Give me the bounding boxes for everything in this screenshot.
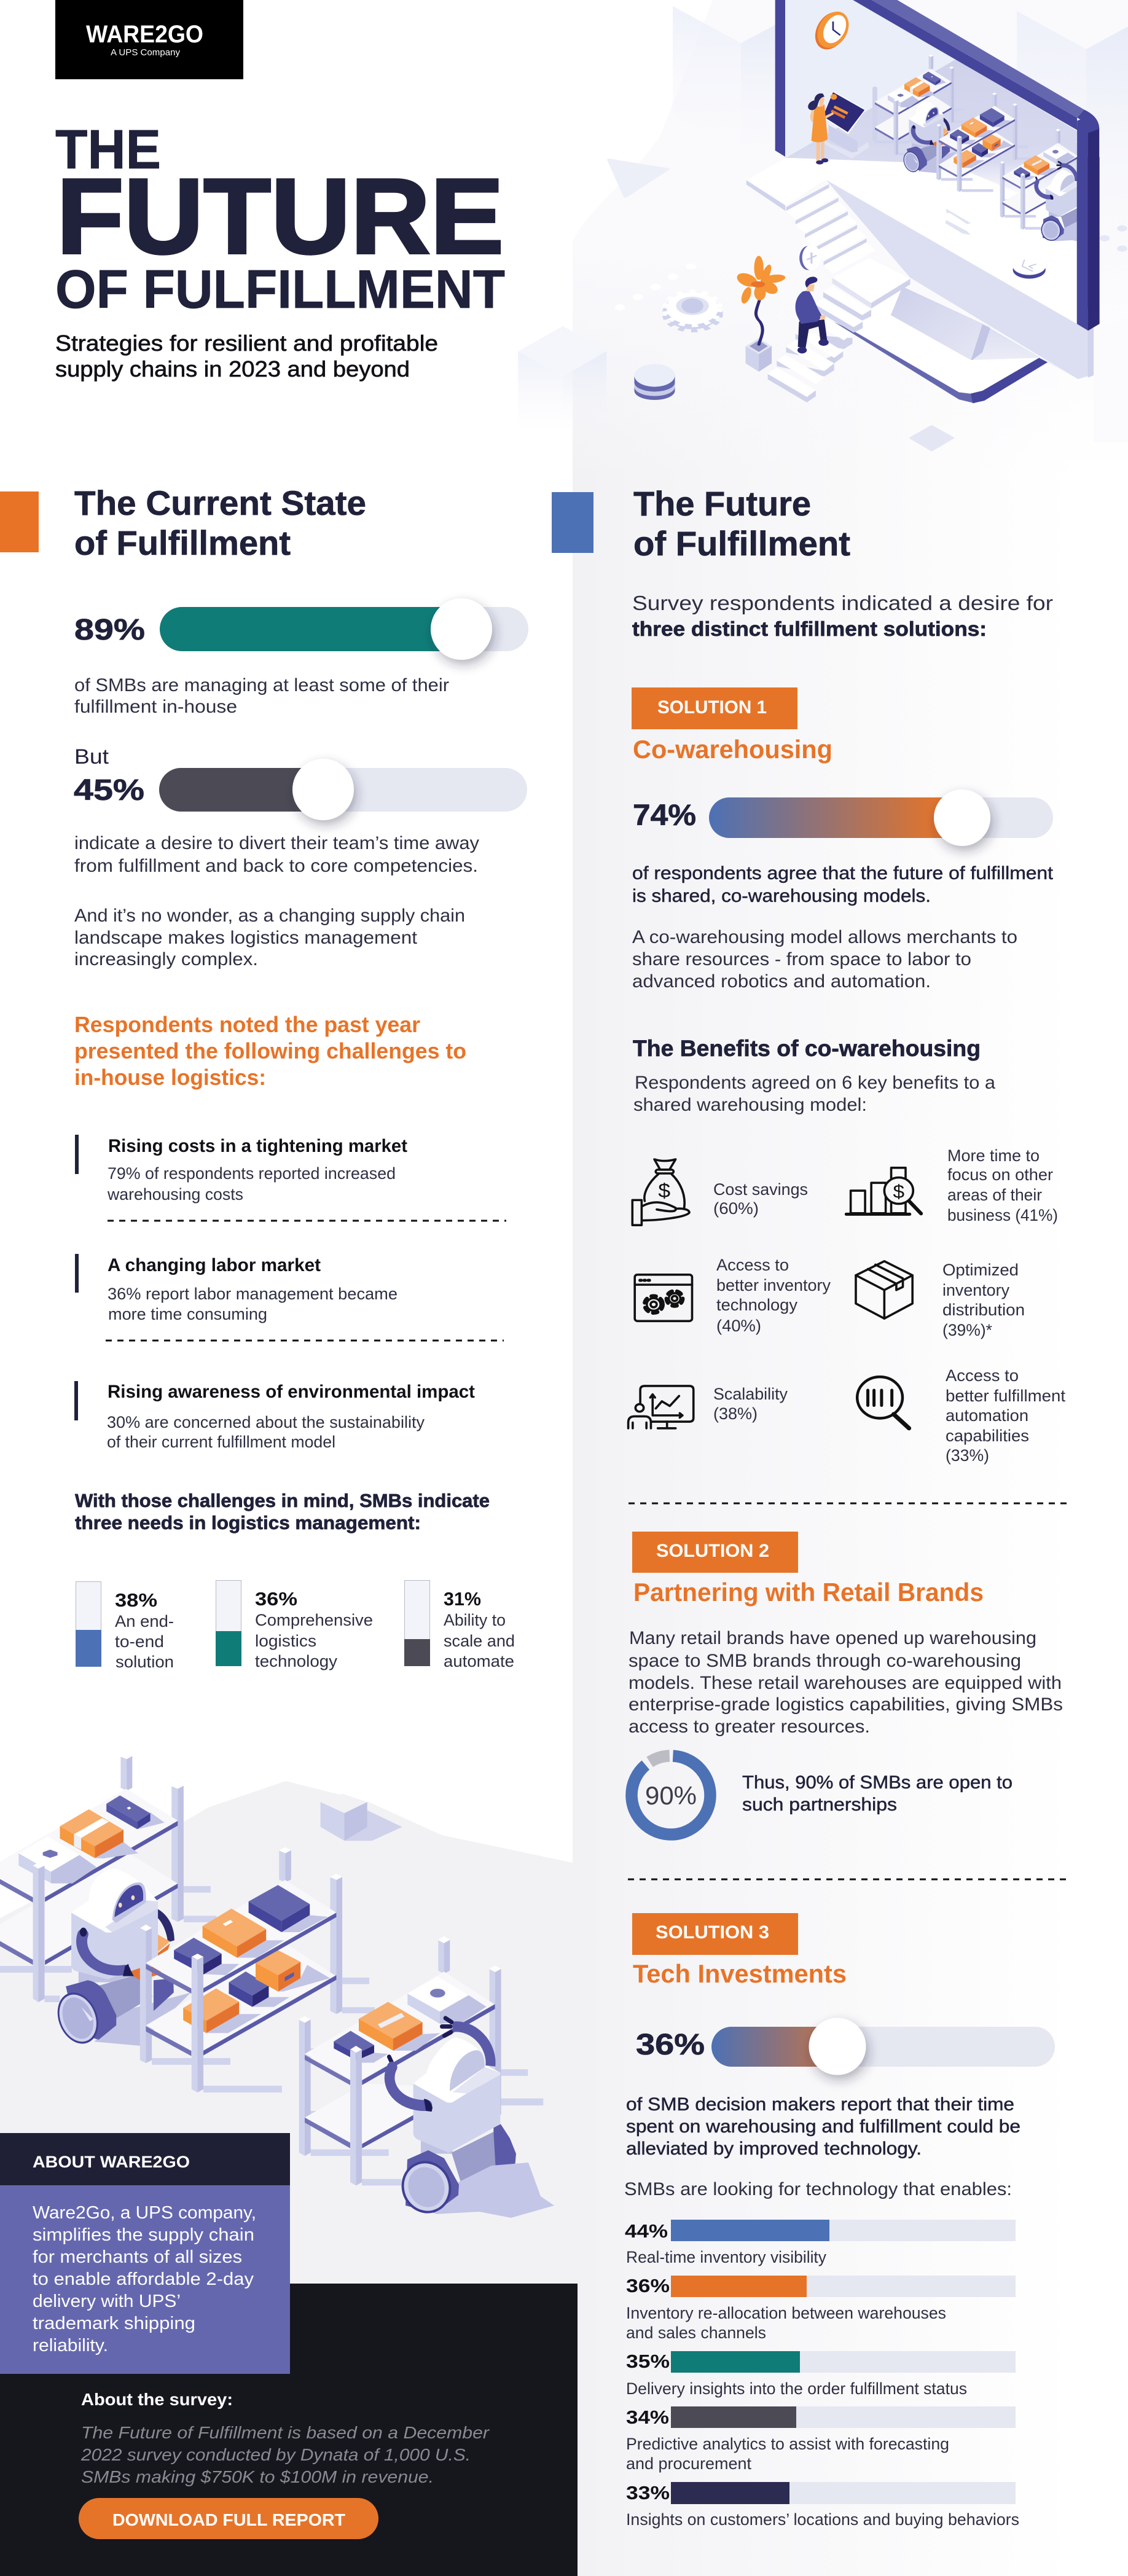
text supply chain bbox=[74, 906, 465, 969]
orange challenges heading bbox=[74, 1012, 466, 1090]
hero illustration bbox=[518, 0, 1128, 451]
icon: box bbox=[856, 1261, 912, 1318]
challenge environmental impact: of their current fulfillment model bbox=[107, 1433, 335, 1451]
icon: money bag: $ bbox=[658, 1180, 670, 1202]
text supply chain: increasingly complex. bbox=[74, 949, 258, 969]
bar 35 percent: Delivery insights into the order fulfillment status bbox=[626, 2379, 967, 2398]
slider 36 percent: 36% bbox=[636, 2029, 705, 2061]
benefit automation bbox=[946, 1366, 1065, 1465]
need 31 percent: scale and bbox=[444, 1632, 515, 1650]
need 38 percent: 38% bbox=[115, 1589, 157, 1611]
section marker blue bbox=[552, 492, 593, 553]
orange challenges heading: in-house logistics: bbox=[74, 1065, 266, 1090]
slider 45 percent bbox=[74, 745, 527, 820]
benefit inventory technology: (40%) bbox=[716, 1317, 761, 1335]
footer dark background bbox=[0, 2284, 578, 2576]
subtitle bbox=[55, 331, 438, 382]
needs heading bbox=[75, 1490, 490, 1533]
bar 33 percent: 33% bbox=[626, 2482, 670, 2504]
text supply chain: landscape makes logistics management bbox=[74, 928, 418, 948]
solution 2 text: Many retail brands have opened up warehousing bbox=[629, 1628, 1036, 1648]
icon: chart magnifier: $ bbox=[893, 1181, 904, 1202]
donut caption bbox=[742, 1772, 1012, 1815]
benefit automation: (33%) bbox=[946, 1446, 989, 1465]
heading future bbox=[633, 484, 850, 563]
need 36 percent: technology bbox=[255, 1652, 337, 1670]
need 38 percent: An end- bbox=[115, 1612, 174, 1631]
benefit automation: automation bbox=[946, 1406, 1028, 1425]
bar 34 percent bbox=[626, 2406, 1016, 2473]
heading current state: of Fulfillment bbox=[74, 523, 291, 562]
donut caption: Thus, 90% of SMBs are open to bbox=[742, 1772, 1012, 1793]
need 31 percent bbox=[404, 1580, 515, 1670]
needs heading: three needs in logistics management: bbox=[75, 1512, 421, 1533]
bar 35 percent bbox=[626, 2351, 1016, 2398]
lower plate bbox=[832, 258, 1078, 403]
donut caption: such partnerships bbox=[742, 1795, 897, 1815]
benefit inventory technology: technology bbox=[716, 1296, 797, 1314]
window frame bbox=[775, 0, 1099, 308]
solution 2 text bbox=[629, 1628, 1063, 1737]
slider 89 percent bbox=[74, 598, 528, 660]
need 31 percent: Ability to bbox=[444, 1611, 506, 1629]
warehouse shelves and robots bbox=[872, 55, 1102, 244]
text 74 percent: is shared, co-warehousing models. bbox=[632, 886, 931, 906]
challenge labor market: A changing labor market bbox=[108, 1255, 321, 1275]
about the survey: SMBs making $750K to $100M in revenue. bbox=[81, 2467, 434, 2486]
benefit inventory technology: Access to bbox=[716, 1256, 789, 1274]
benefit inventory distribution: inventory bbox=[942, 1281, 1009, 1299]
technology intro: SMBs are looking for technology that enables: bbox=[624, 2179, 1012, 2199]
about the survey: The Future of Fulfillment is based on a December bbox=[81, 2423, 490, 2442]
solution 2 text: space to SMB brands through co-warehousing bbox=[629, 1651, 1021, 1671]
text 45 percent bbox=[74, 833, 479, 876]
slider 89 percent: 89% bbox=[74, 614, 145, 646]
co-warehousing description: advanced robotics and automation. bbox=[632, 971, 931, 992]
bar 34 percent: Predictive analytics to assist with forecasting bbox=[626, 2435, 949, 2453]
benefit more time: areas of their bbox=[947, 1186, 1042, 1204]
challenge labor market: more time consuming bbox=[108, 1305, 267, 1323]
icon: window gears bbox=[635, 1275, 692, 1321]
solution 2 badge: SOLUTION 2 bbox=[656, 1541, 769, 1561]
co-warehousing description: share resources - from space to labor to bbox=[632, 949, 971, 969]
bar 34 percent: and procurement bbox=[626, 2454, 751, 2473]
need 36 percent: logistics bbox=[255, 1632, 316, 1650]
about text: reliability. bbox=[33, 2336, 108, 2355]
benefit cost savings: Cost savings bbox=[713, 1180, 808, 1199]
text 45 percent: from fulfillment and back to core competencies. bbox=[74, 856, 478, 876]
about text bbox=[33, 2203, 256, 2355]
benefit automation: capabilities bbox=[946, 1427, 1029, 1445]
right panel background bbox=[573, 240, 1128, 2576]
solution 2 badge bbox=[632, 1532, 798, 1573]
heading current state bbox=[74, 483, 366, 562]
download button bbox=[79, 2498, 378, 2539]
man on stairs bbox=[796, 276, 829, 353]
text 36 percent: spent on warehousing and fulfillment could be bbox=[626, 2116, 1020, 2137]
floating dots bbox=[615, 264, 696, 310]
coin stack bbox=[634, 364, 675, 400]
benefit automation: better fulfillment bbox=[946, 1387, 1065, 1405]
about text: simplifies the supply chain bbox=[33, 2225, 254, 2245]
challenge rising costs: 79% of respondents reported increased bbox=[108, 1164, 396, 1183]
need 38 percent: solution bbox=[116, 1653, 174, 1671]
text supply chain: And it’s no wonder, as a changing supply chain bbox=[74, 906, 465, 926]
benefit inventory distribution: Optimized bbox=[942, 1261, 1019, 1279]
subtitle: supply chains in 2023 and beyond bbox=[55, 356, 410, 382]
benefit scalability: (38%) bbox=[713, 1404, 758, 1423]
bar 36 percent: and sales channels bbox=[626, 2323, 766, 2342]
benefit inventory distribution: distribution bbox=[942, 1301, 1025, 1319]
text 89 percent: fulfillment in-house bbox=[74, 697, 237, 717]
need 31 percent: automate bbox=[444, 1652, 514, 1670]
donut 90 percent: 90% bbox=[645, 1781, 697, 1810]
benefit scalability: Scalability bbox=[713, 1385, 788, 1403]
subtitle: Strategies for resilient and profitable bbox=[55, 331, 438, 356]
orange challenges heading: Respondents noted the past year bbox=[74, 1012, 420, 1037]
bar 33 percent bbox=[626, 2482, 1019, 2529]
co-warehousing description: A co-warehousing model allows merchants to bbox=[632, 927, 1017, 947]
icon: scalability presenter bbox=[629, 1386, 694, 1428]
benefit inventory distribution: (39%)* bbox=[942, 1321, 992, 1339]
upper stairs bbox=[786, 184, 875, 274]
need 38 percent: to-end bbox=[115, 1632, 164, 1651]
bar 36 percent bbox=[626, 2275, 1016, 2342]
bar 44 percent: Real-time inventory visibility bbox=[626, 2248, 826, 2266]
about text: for merchants of all sizes bbox=[33, 2247, 242, 2267]
flower pot bbox=[733, 256, 787, 372]
bar 36 percent: 36% bbox=[626, 2275, 670, 2296]
woman bbox=[808, 93, 834, 165]
solution 1 badge bbox=[632, 687, 797, 729]
logo: WARE2GO bbox=[86, 21, 203, 48]
needs heading: With those challenges in mind, SMBs indicate bbox=[75, 1490, 490, 1511]
benefits intro: shared warehousing model: bbox=[633, 1095, 867, 1115]
challenge environmental impact: 30% are concerned about the sustainability bbox=[107, 1413, 425, 1431]
challenge rising costs: warehousing costs bbox=[107, 1185, 243, 1204]
download button: DOWNLOAD FULL REPORT bbox=[112, 2510, 345, 2529]
slider 36 percent bbox=[636, 2018, 1055, 2075]
need 36 percent: Comprehensive bbox=[255, 1611, 373, 1629]
bar 35 percent: 35% bbox=[626, 2351, 670, 2372]
benefit more time: business (41%) bbox=[947, 1206, 1058, 1224]
solution 3 badge: SOLUTION 3 bbox=[656, 1922, 769, 1943]
heading future: of Fulfillment bbox=[633, 524, 850, 563]
solution 2 text: access to greater resources. bbox=[629, 1717, 870, 1737]
back wall and floor bbox=[785, 0, 1077, 235]
need 31 percent: 31% bbox=[444, 1588, 481, 1610]
solution 1 badge: SOLUTION 1 bbox=[657, 697, 767, 718]
slider 74 percent bbox=[633, 789, 1053, 846]
solution 2 text: models. These retail warehouses are equipped with bbox=[629, 1673, 1062, 1693]
bar 44 percent: 44% bbox=[625, 2220, 668, 2242]
main title bbox=[55, 119, 505, 319]
solution 3 title: Tech Investments bbox=[633, 1959, 847, 1988]
icon: money bag bbox=[632, 1159, 689, 1225]
bar chart: technology needs bbox=[625, 2220, 1019, 2529]
text 36 percent: alleviated by improved technology. bbox=[626, 2139, 922, 2159]
challenge labor market: 36% report labor management became bbox=[108, 1285, 398, 1303]
about the survey: About the survey: bbox=[81, 2390, 233, 2409]
benefit more time: More time to bbox=[947, 1146, 1040, 1165]
bar 34 percent: 34% bbox=[626, 2406, 669, 2428]
text 45 percent: indicate a desire to divert their team’s time away bbox=[74, 833, 479, 853]
text 36 percent bbox=[626, 2094, 1020, 2159]
need 38 percent bbox=[76, 1581, 174, 1671]
slider 45 percent: But bbox=[74, 745, 109, 769]
panel: current state bbox=[0, 483, 528, 1671]
benefit more time: focus on other bbox=[947, 1165, 1053, 1184]
orange challenges heading: presented the following challenges to bbox=[74, 1038, 466, 1063]
survey intro bbox=[632, 592, 1053, 640]
text 89 percent bbox=[74, 675, 449, 717]
solution 1 title: Co-warehousing bbox=[633, 735, 832, 764]
benefit automation: Access to bbox=[946, 1366, 1019, 1385]
benefits intro bbox=[633, 1073, 995, 1115]
text 89 percent: of SMBs are managing at least some of their bbox=[74, 675, 449, 695]
gear bbox=[665, 291, 720, 331]
heading current state: The Current State bbox=[74, 483, 366, 522]
challenge labor market bbox=[75, 1254, 398, 1323]
text 74 percent: of respondents agree that the future of fulfillment bbox=[632, 863, 1054, 883]
heading future: The Future bbox=[633, 484, 811, 523]
solution 2 text: enterprise-grade logistics capabilities, giving SMBs bbox=[629, 1694, 1063, 1715]
donut 90 percent bbox=[632, 1756, 710, 1834]
kiosk bbox=[822, 91, 869, 159]
about text: Ware2Go, a UPS company, bbox=[33, 2203, 256, 2223]
plus coin bbox=[799, 245, 821, 270]
co-warehousing description bbox=[632, 927, 1017, 992]
logo: A UPS Company bbox=[111, 47, 180, 58]
bar 33 percent: Insights on customers’ locations and buying behaviors bbox=[626, 2510, 1019, 2529]
panel: about ware2go bbox=[0, 2133, 290, 2374]
about text: trademark shipping bbox=[33, 2314, 195, 2333]
need 36 percent: 36% bbox=[255, 1588, 297, 1610]
bar 44 percent bbox=[625, 2220, 1016, 2266]
benefit inventory technology bbox=[716, 1256, 831, 1335]
about the survey: 2022 survey conducted by Dynata of 1,000 U.S. bbox=[80, 2445, 471, 2464]
cart coin bbox=[1013, 257, 1046, 279]
about text: delivery with UPS’ bbox=[33, 2292, 181, 2311]
challenge rising costs bbox=[75, 1135, 407, 1204]
need 36 percent bbox=[216, 1580, 373, 1670]
benefit cost savings bbox=[713, 1180, 808, 1218]
clock bbox=[809, 7, 855, 53]
benefit more time bbox=[947, 1146, 1058, 1224]
slider 74 percent: 74% bbox=[633, 799, 696, 832]
challenge environmental impact bbox=[74, 1381, 475, 1451]
benefit inventory technology: better inventory bbox=[716, 1276, 831, 1294]
panel: about ware2go: ABOUT WARE2GO bbox=[33, 2153, 190, 2171]
warehouse illustration bbox=[0, 1753, 573, 2284]
main title: THE bbox=[55, 119, 161, 181]
panel: future of fulfillment bbox=[552, 484, 1071, 2529]
text 36 percent: of SMB decision makers report that their time bbox=[626, 2094, 1014, 2115]
about text: to enable affordable 2-day bbox=[33, 2269, 254, 2289]
section marker orange bbox=[0, 491, 39, 552]
slider 45 percent: 45% bbox=[74, 774, 144, 807]
solution 2 title: Partnering with Retail Brands bbox=[633, 1578, 984, 1607]
survey intro: three distinct fulfillment solutions: bbox=[632, 617, 987, 640]
benefits intro: Respondents agreed on 6 key benefits to a bbox=[635, 1073, 995, 1093]
about the survey bbox=[80, 2390, 490, 2486]
benefit inventory distribution bbox=[942, 1261, 1025, 1339]
benefits heading: The Benefits of co-warehousing bbox=[633, 1036, 981, 1061]
solution 3 badge bbox=[632, 1913, 798, 1955]
bar 36 percent: Inventory re-allocation between warehouses bbox=[626, 2304, 946, 2322]
main title: FUTURE bbox=[57, 156, 504, 276]
survey intro: Survey respondents indicated a desire for bbox=[632, 592, 1053, 614]
challenge rising costs: Rising costs in a tightening market bbox=[108, 1136, 407, 1156]
icon: chart magnifier bbox=[846, 1168, 921, 1214]
benefit scalability bbox=[713, 1385, 788, 1423]
icon: barcode search bbox=[857, 1377, 909, 1428]
benefit cost savings: (60%) bbox=[713, 1199, 759, 1218]
lower stairs bbox=[768, 286, 871, 402]
logo bbox=[55, 0, 243, 79]
challenge environmental impact: Rising awareness of environmental impact bbox=[108, 1382, 475, 1402]
main title: OF FULFILLMENT bbox=[55, 259, 505, 319]
text 74 percent bbox=[632, 863, 1054, 906]
